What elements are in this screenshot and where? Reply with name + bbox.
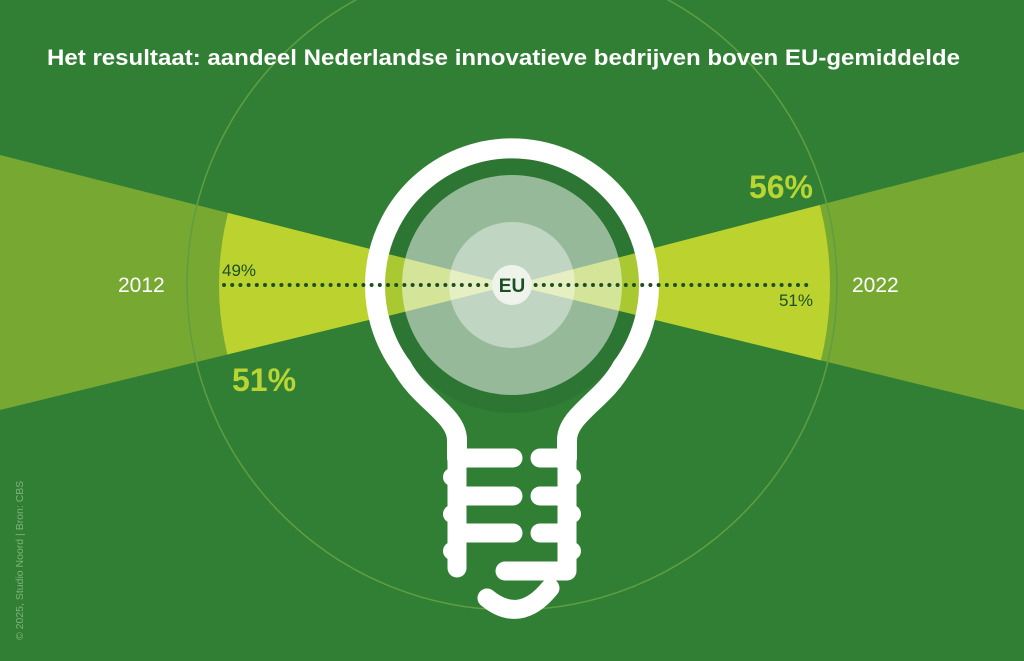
value: EU 2012 49%: 49% [222, 261, 256, 280]
value: NL 2012 51%: 51% [232, 362, 296, 398]
wedge: 2012 olive outer [0, 155, 512, 410]
label: 2012: 2012 [118, 274, 165, 297]
EU marker [492, 265, 532, 305]
wedge: 2022 olive outer [512, 152, 1024, 410]
icon: light bulb outline [375, 148, 649, 609]
label: 2022: 2022 [852, 274, 899, 297]
dotted EU line [224, 283, 814, 287]
credit: © 2025, Studio Noord | Bron: CBS [14, 481, 26, 640]
wedge: 2022 bright inner [654, 205, 830, 360]
bulb glow circles [384, 157, 640, 413]
wedge: 2012 bright inner [219, 213, 370, 354]
EU marker: EU [499, 276, 525, 297]
value: NL 2022 56%: 56% [749, 169, 813, 205]
title: Het resultaat: aandeel Nederlandse innovatieve bedrijven boven EU-gemiddelde [47, 45, 960, 70]
value: EU 2022 51%: 51% [779, 291, 813, 310]
